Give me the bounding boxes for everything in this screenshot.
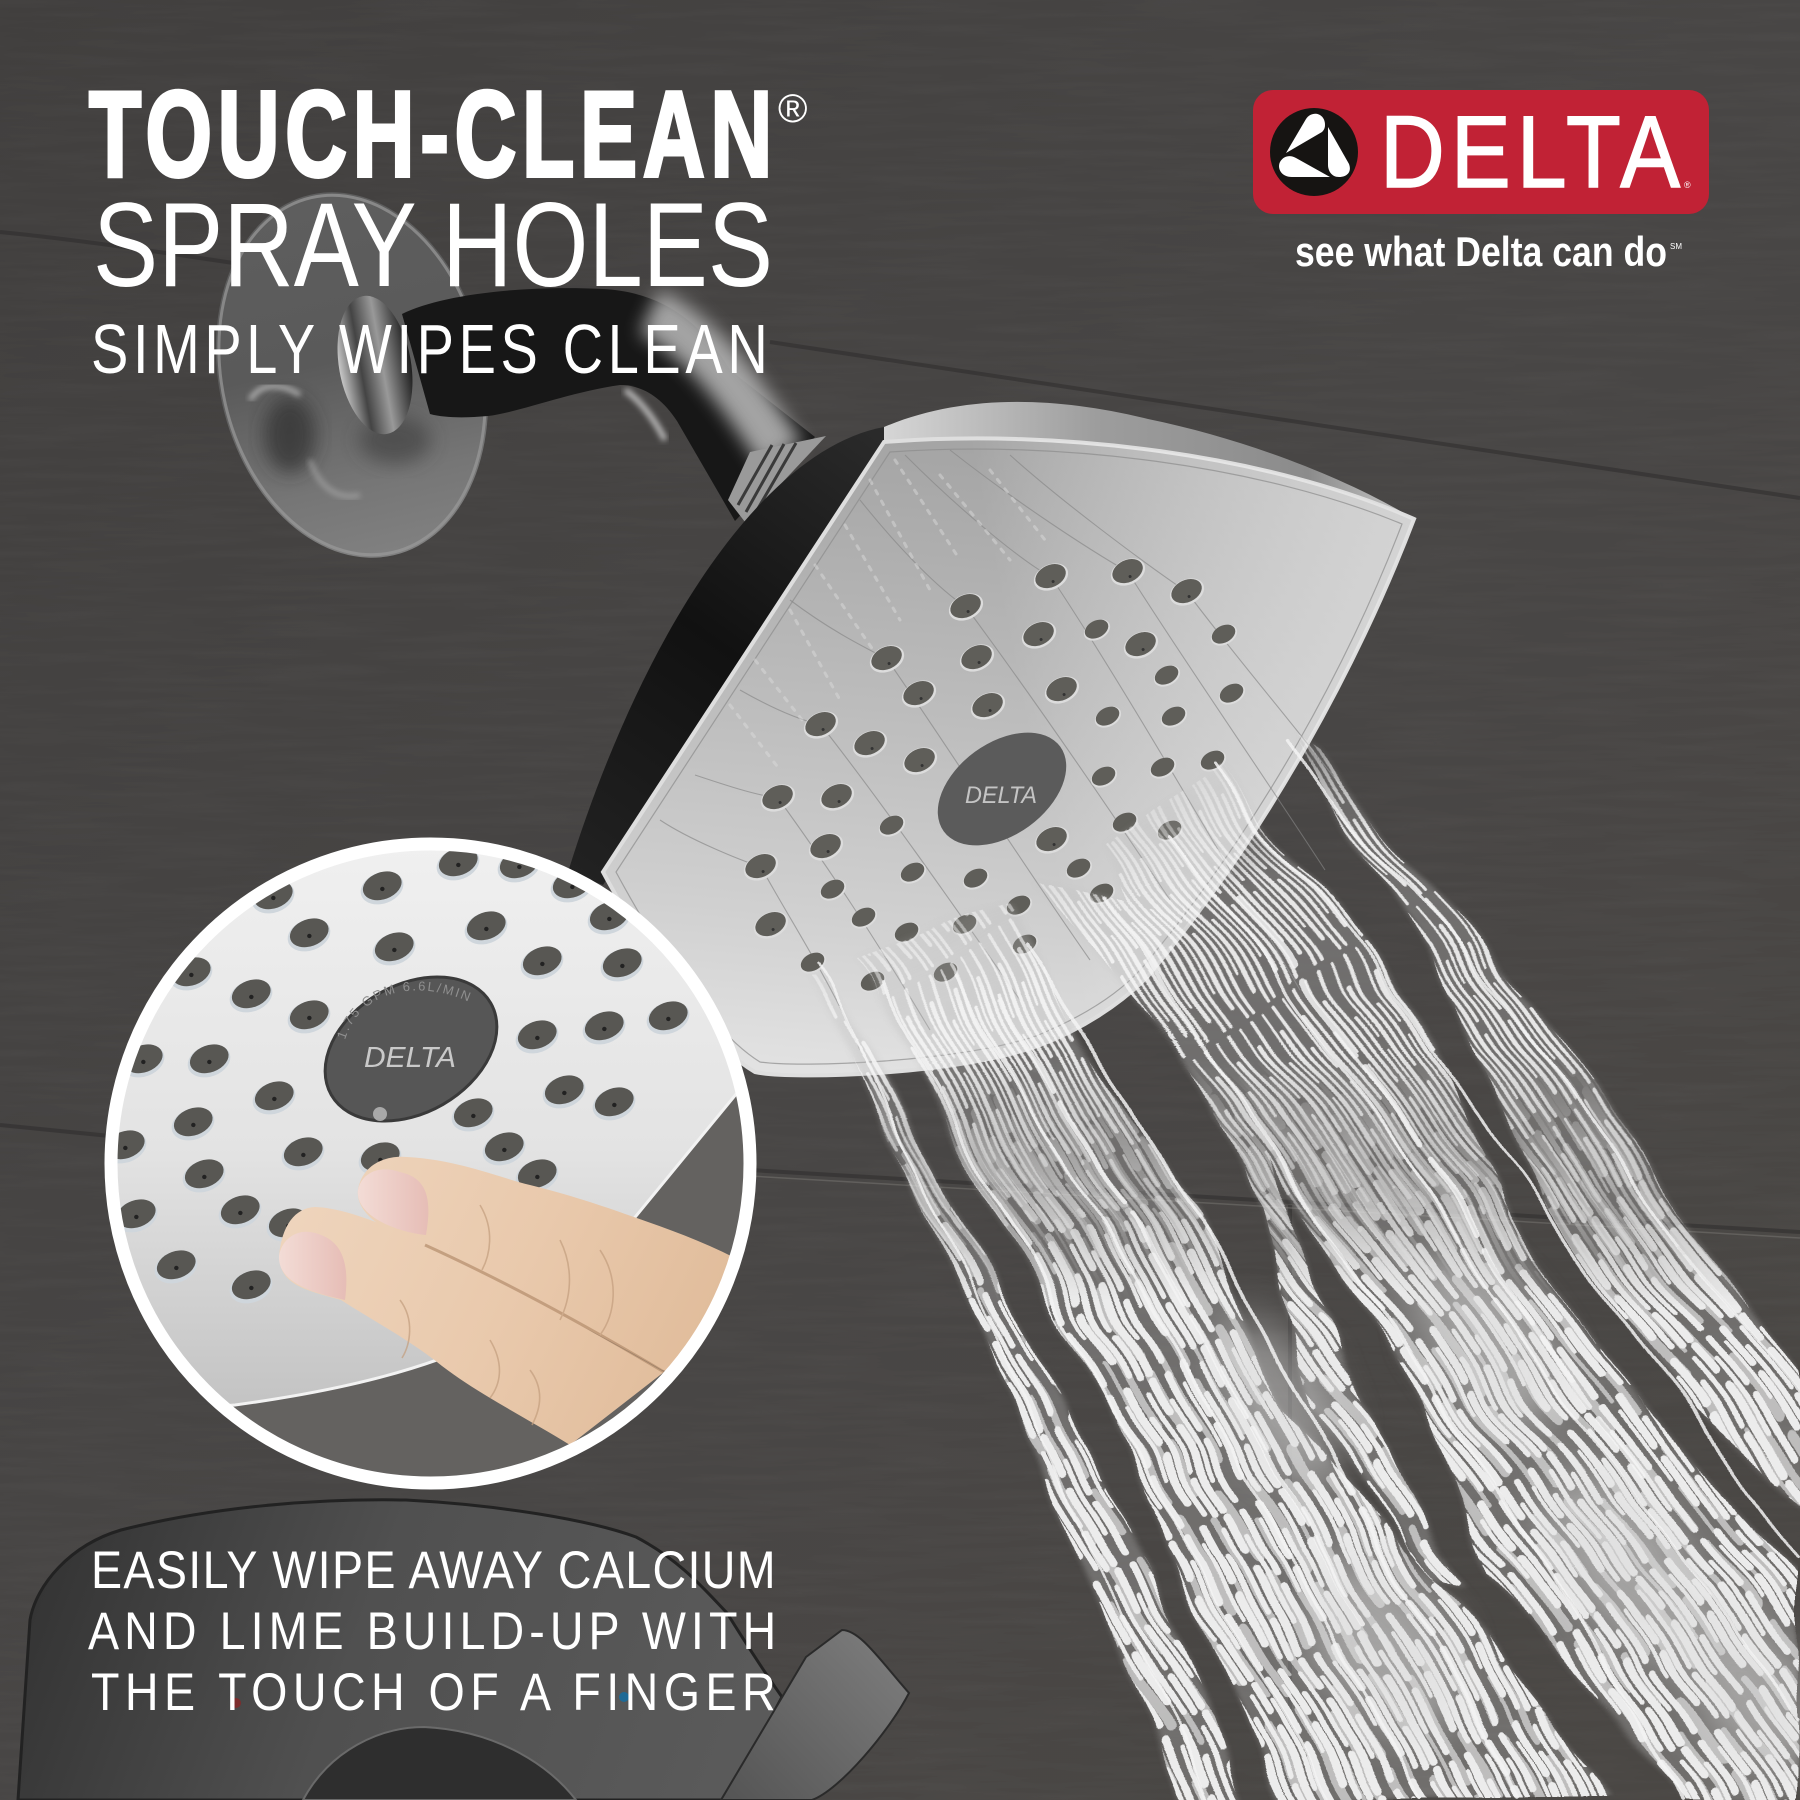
chrome highlight on elbow [650, 312, 782, 455]
white ring [111, 844, 750, 1483]
elbow arm [402, 288, 815, 521]
spray face [603, 438, 1414, 1075]
chrome top rim [884, 402, 1414, 519]
zoomed logo badge [324, 976, 498, 1122]
service mark: SM [1670, 242, 1682, 251]
collar [327, 290, 423, 440]
lower finger [279, 1207, 664, 1445]
upper nail [358, 1169, 428, 1235]
inset circle: finger wiping spray holes [104, 838, 756, 1490]
fingers [279, 1157, 735, 1445]
body copy: AND LIME BUILD-UP WITH [88, 1601, 776, 1661]
hub [303, 1727, 576, 1800]
lever handle [721, 1630, 909, 1800]
shower head [568, 402, 1414, 1075]
red badge [1253, 90, 1709, 214]
title: Touch-Clean: TOUCH-CLEAN [89, 67, 772, 203]
dark back of head [568, 427, 884, 885]
subtitle: spray holes: SPRAY HOLES [93, 178, 773, 312]
wordmark: DELTA [1380, 96, 1680, 209]
zoomed spray holes [99, 842, 694, 1309]
shower arm and flange [181, 165, 826, 585]
zoomed spray face [118, 850, 736, 1407]
upper finger [358, 1157, 735, 1380]
valve trim plate and lever [18, 1500, 909, 1800]
center logo badge [917, 709, 1087, 869]
zoomed logo badge: 1.75 GPM 6.6L/MIN [338, 982, 470, 1039]
body copy [88, 1540, 776, 1722]
slogan: see what Delta can do [1295, 228, 1667, 275]
water spray streams [804, 735, 1800, 1800]
emblem [1270, 108, 1358, 196]
broken lower droplets [868, 1064, 1800, 1800]
red and blue dots [231, 1698, 241, 1708]
tagline: simply wipes clean: SIMPLY WIPES CLEAN [91, 311, 768, 388]
registered mark: ® [778, 87, 807, 131]
logo registered mark: ® [1684, 180, 1691, 190]
water trails on face [660, 450, 1340, 1050]
blurred droplet clumps [1196, 1227, 1800, 1792]
Delta logo [1253, 90, 1709, 275]
trim plate [18, 1500, 782, 1800]
zoomed logo badge: DELTA [364, 1042, 456, 1074]
body copy: THE TOUCH OF A FINGER [91, 1662, 776, 1722]
spray holes [739, 553, 1249, 997]
long stream lines [813, 745, 1800, 1800]
center logo badge: DELTA [965, 782, 1037, 809]
fine upper streaks [812, 734, 1732, 1292]
body copy: EASILY WIPE AWAY CALCIUM [91, 1540, 776, 1600]
wall flange [181, 165, 523, 585]
soft haze under the streams [804, 735, 1800, 1800]
lower nail [279, 1232, 346, 1300]
threaded collar [728, 436, 826, 522]
